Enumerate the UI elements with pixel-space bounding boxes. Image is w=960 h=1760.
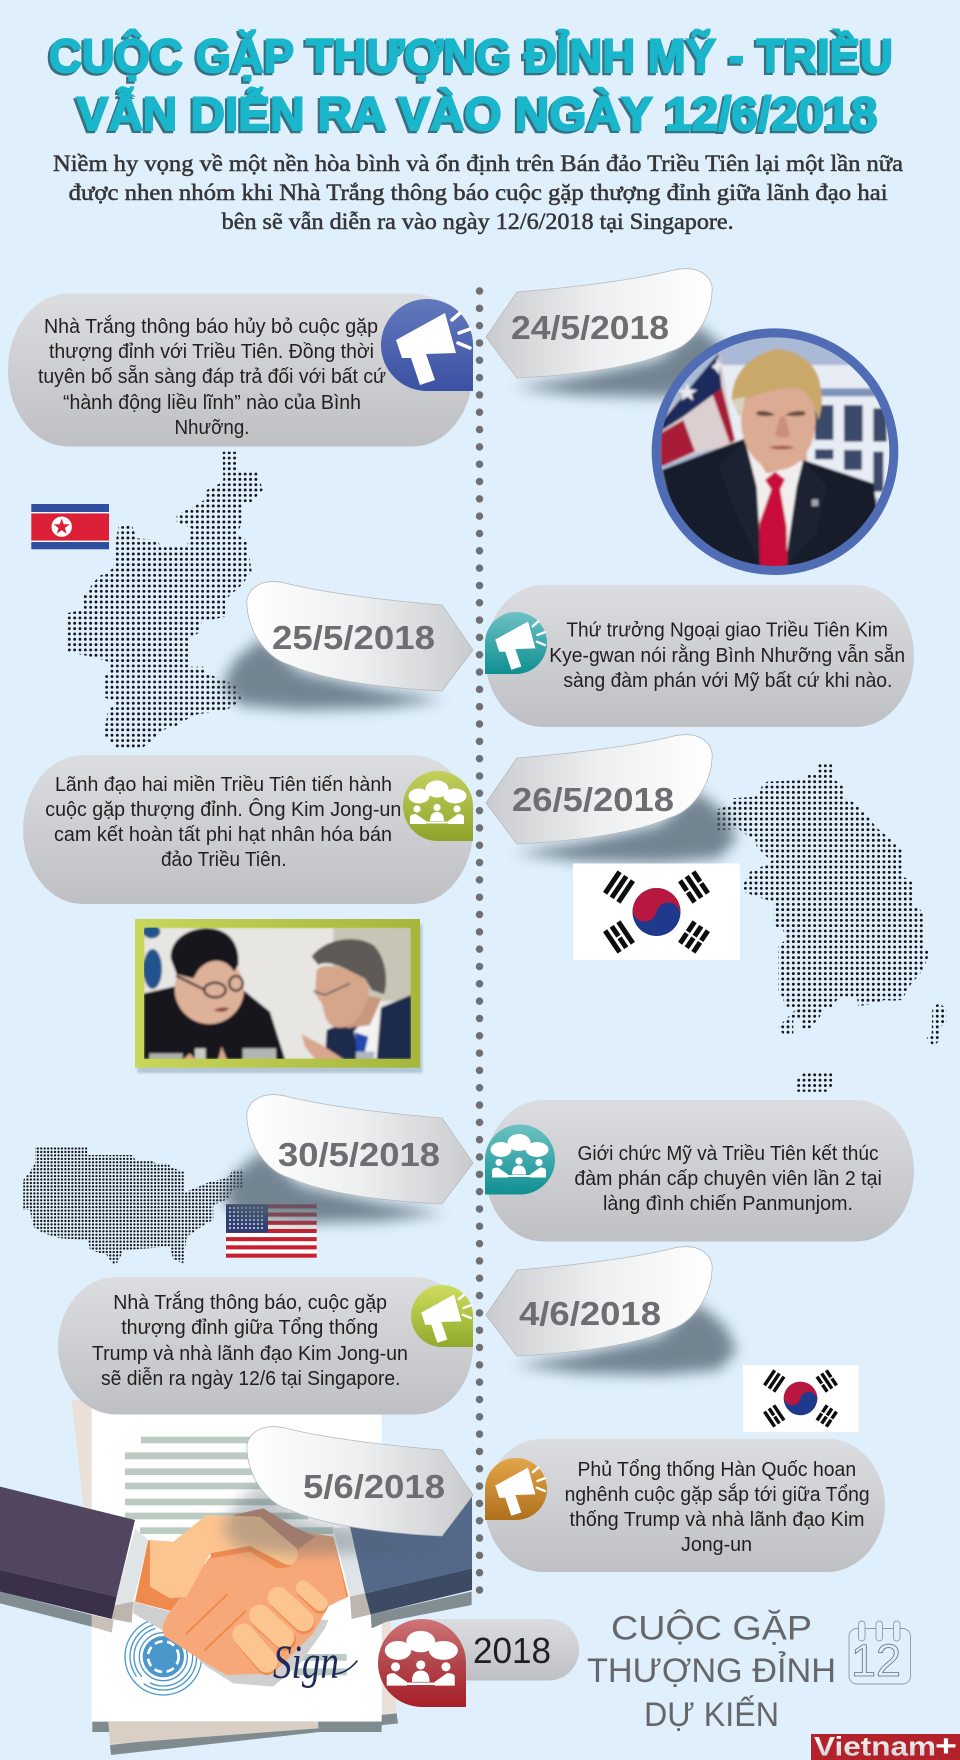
bubble text: sàng đàm phán với Mỹ bất cứ khi nào. <box>563 669 892 692</box>
right sleeve <box>333 1497 472 1628</box>
heading: planned summit: DỰ KIẾN <box>644 1696 779 1734</box>
bubble text: nghênh cuộc gặp sắp tới giữa Tổng <box>565 1483 870 1506</box>
bubble text: Kye-gwan nói rằng Bình Nhưỡng vẫn sẵn <box>549 644 905 667</box>
bubble: 24/5 White House cancels <box>8 294 473 446</box>
bubble text: sẽ diễn ra ngày 12/6 tại Singapore. <box>101 1367 400 1390</box>
bubble text: Phủ Tổng thống Hàn Quốc hoan <box>578 1458 856 1481</box>
bubble text: đảo Triều Tiên. <box>161 848 286 871</box>
photo: Kim Jong-un and Moon Jae-in <box>135 919 422 1073</box>
icon: meeting olive <box>403 771 473 841</box>
title: CUỘC GẶP THƯỢNG ĐỈNH MỸ - TRIỀU <box>49 29 893 82</box>
date 25/5/2018: 25/5/2018 <box>272 619 435 656</box>
bubble text: thượng đỉnh giữa Tổng thống <box>121 1316 378 1339</box>
icon: megaphone blue <box>381 299 473 391</box>
bubble text: làng đình chiến Panmunjom. <box>603 1192 853 1215</box>
bubble text <box>549 618 905 692</box>
bubble text <box>45 773 401 871</box>
bubble: 25/5 Kim Kye-gwan statement <box>485 585 914 727</box>
intro paragraph: Niềm hy vọng về một nền hòa bình và ổn định trên Bán đảo Triều Tiên lại một lần nữa <box>53 151 904 177</box>
bubble text: tuyên bố sẵn sàng đáp trả đối với bất cứ <box>38 365 386 388</box>
date 5/6/2018: 5/6/2018 <box>303 1468 445 1505</box>
flag: South Korea large <box>573 864 740 960</box>
bubble text: thượng đỉnh với Triều Tiên. Đồng thời <box>49 340 374 363</box>
event 5/6/2018 ribbon <box>222 1427 473 1555</box>
bubble text: đàm phán cấp chuyên viên lần 2 tại <box>574 1167 882 1190</box>
bubble text: Lãnh đạo hai miền Triều Tiên tiến hành <box>55 773 392 796</box>
bubble text <box>92 1291 408 1390</box>
title: VẪN DIỄN RA VÀO NGÀY 12/6/2018 <box>74 89 876 142</box>
title <box>47 29 893 142</box>
logo: Vietnam+ <box>811 1730 960 1760</box>
icon: calendar 12: 12 <box>851 1635 901 1686</box>
portrait: Trump <box>652 328 898 587</box>
event 24/5/2018 ribbon <box>486 269 737 397</box>
intro paragraph: bên sẽ vẫn diễn ra vào ngày 12/6/2018 tại Singapore. <box>222 209 734 235</box>
icon: megaphone lime <box>411 1285 473 1347</box>
timeline dotted line <box>476 291 483 1607</box>
signature: Sign <box>273 1636 339 1689</box>
flag: United States <box>226 1204 317 1258</box>
event 30/5/2018 ribbon <box>222 1095 473 1223</box>
bubble text: Jong-un <box>681 1533 752 1556</box>
bubble: 5/6 South Korea welcomes <box>485 1439 885 1572</box>
paper stack <box>72 1400 398 1755</box>
bubble text <box>574 1142 882 1215</box>
bubble: 30/5 Panmunjom talks <box>485 1100 914 1242</box>
icon: meeting teal <box>485 1124 555 1194</box>
final event: 2018 pill with meeting icon <box>378 1619 579 1707</box>
map: North Korea dotted <box>64 453 269 746</box>
event 4/6/2018 ribbon <box>486 1247 737 1375</box>
title: VẪN DIỄN RA VÀO NGÀY 12/6/2018 <box>76 87 878 140</box>
icon: meeting red <box>378 1619 466 1707</box>
signature tail <box>333 1661 357 1674</box>
intro paragraph: được nhen nhóm khi Nhà Trắng thông báo cuộc gặp thượng đỉnh giữa lãnh đạo hai <box>69 180 888 206</box>
bubble text: cuộc gặp thượng đỉnh. Ông Kim Jong-un <box>45 798 401 821</box>
bubble text: “hành động liều lĩnh” nào của Bình <box>63 391 361 414</box>
intro paragraph <box>53 151 904 235</box>
bubble text <box>38 315 386 439</box>
heading: planned summit: CUỘC GẶP <box>611 1610 812 1648</box>
left sleeve <box>0 1487 148 1632</box>
bubble: 26/5 inter-Korean summit <box>23 755 473 904</box>
event 26/5/2018 ribbon <box>486 735 737 863</box>
map: South Korea dotted <box>713 766 953 1091</box>
bubble text: Nhà Trắng thông báo, cuộc gặp <box>113 1291 387 1314</box>
date 4/6/2018: 4/6/2018 <box>519 1295 661 1332</box>
illustration: contract and handshake <box>0 1400 472 1755</box>
stamp <box>125 1618 202 1695</box>
date 24/5/2018: 24/5/2018 <box>511 309 669 346</box>
icon: calendar 12 <box>849 1621 910 1686</box>
bubble text: Thứ trưởng Ngoại giao Triều Tiên Kim <box>566 618 888 642</box>
year label: 2018 <box>473 1630 551 1671</box>
hands shadow <box>133 1602 328 1687</box>
date 30/5/2018: 30/5/2018 <box>278 1136 440 1173</box>
bubble text: thống Trump và nhà lãnh đạo Kim <box>570 1508 864 1531</box>
heading: planned summit: THƯỢNG ĐỈNH <box>587 1652 836 1690</box>
flag: North Korea <box>31 504 109 549</box>
hands <box>135 1508 348 1675</box>
heading: planned summit <box>587 1610 836 1734</box>
map: United States dotted <box>24 1148 246 1262</box>
icon: megaphone teal <box>485 612 547 674</box>
bubble text: Nhưỡng. <box>174 416 250 439</box>
bubble text: cam kết hoàn tất phi hạt nhân hóa bán <box>54 823 392 846</box>
contract text lines <box>125 1437 347 1675</box>
bubble text: Giới chức Mỹ và Triều Tiên kết thúc <box>578 1142 878 1165</box>
bubble text: Nhà Trắng thông báo hủy bỏ cuộc gặp <box>44 315 378 338</box>
flag: South Korea small <box>743 1365 858 1432</box>
date 26/5/2018: 26/5/2018 <box>512 781 674 818</box>
bubble text: Trump và nhà lãnh đạo Kim Jong-un <box>92 1342 408 1365</box>
title: CUỘC GẶP THƯỢNG ĐỈNH MỸ - TRIỀU <box>47 31 891 84</box>
icon: megaphone orange <box>485 1458 547 1520</box>
event 25/5/2018 ribbon <box>222 582 473 710</box>
bubble text <box>565 1458 870 1556</box>
bubble: 4/6 White House announces <box>58 1277 473 1414</box>
